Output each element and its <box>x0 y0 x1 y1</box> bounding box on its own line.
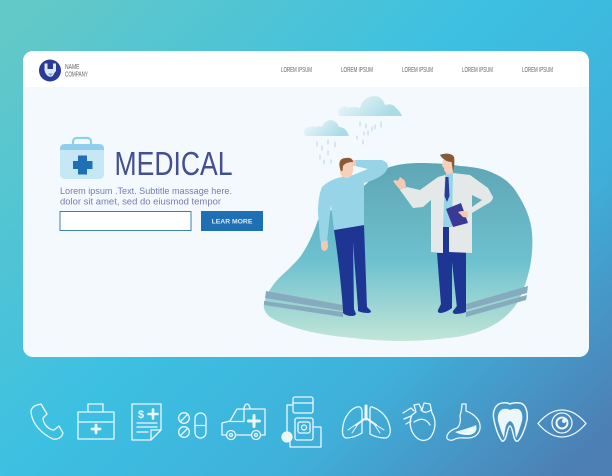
neck <box>446 168 453 177</box>
subtitle text: Lorem ipsum .Text. Subtitle massage here. <box>60 186 232 196</box>
subtitle text: dolor sit amet, sed do eiusmod tempor <box>60 196 221 206</box>
legs <box>437 225 466 308</box>
hair <box>339 158 353 171</box>
sweater <box>318 160 388 241</box>
icon: medical kit <box>60 138 104 179</box>
icon row <box>31 397 586 447</box>
icon: pills <box>179 413 206 438</box>
icon: lungs <box>342 406 390 438</box>
hair <box>440 154 454 172</box>
coat notch <box>472 195 482 207</box>
icon: first aid kit <box>78 404 114 439</box>
logo <box>39 60 88 82</box>
navigation links: LOREM IPSUM <box>462 67 493 74</box>
neck <box>342 170 351 179</box>
icon: heart <box>403 403 435 440</box>
cloud left <box>304 120 349 136</box>
hand waving <box>393 177 406 191</box>
panel: landing page card <box>23 51 589 357</box>
icon: tooth <box>493 403 527 441</box>
header bar <box>23 51 589 87</box>
icon: invoice <box>132 404 161 440</box>
logo: COMPANY <box>65 72 88 78</box>
shoes <box>343 309 356 316</box>
illustration: patient and doctor <box>264 96 532 341</box>
logo: NAME <box>65 64 80 71</box>
navigation links: LOREM IPSUM <box>522 67 553 74</box>
icon: medical device <box>282 397 321 447</box>
navigation links <box>281 67 553 74</box>
icon: phone <box>31 404 63 439</box>
icon: ambulance <box>222 404 265 440</box>
hand <box>321 240 328 251</box>
cloud right <box>338 96 402 116</box>
shoes <box>438 304 452 313</box>
navigation links: LOREM IPSUM <box>402 67 433 74</box>
icon: eye <box>538 410 586 437</box>
hand on head <box>351 160 356 166</box>
face <box>442 160 453 173</box>
coat <box>400 173 493 253</box>
tie <box>444 177 450 202</box>
navigation links: LOREM IPSUM <box>281 67 312 74</box>
navigation links: LOREM IPSUM <box>341 67 373 74</box>
patient <box>318 158 388 316</box>
background blob <box>264 163 532 341</box>
shirt <box>443 173 453 227</box>
hand on clipboard <box>458 211 468 217</box>
button <box>201 211 263 231</box>
rain <box>317 122 381 164</box>
button: LEAR MORE <box>212 218 253 226</box>
clipboard <box>446 203 468 227</box>
title: MEDICAL <box>114 145 232 182</box>
icon: invoice: $ <box>138 409 144 421</box>
legs <box>334 225 367 310</box>
head <box>340 162 353 178</box>
subtitle text <box>60 186 232 206</box>
doctor <box>393 154 493 314</box>
input field <box>60 212 191 230</box>
icon: stomach <box>447 404 480 440</box>
floor stripes <box>265 291 343 311</box>
